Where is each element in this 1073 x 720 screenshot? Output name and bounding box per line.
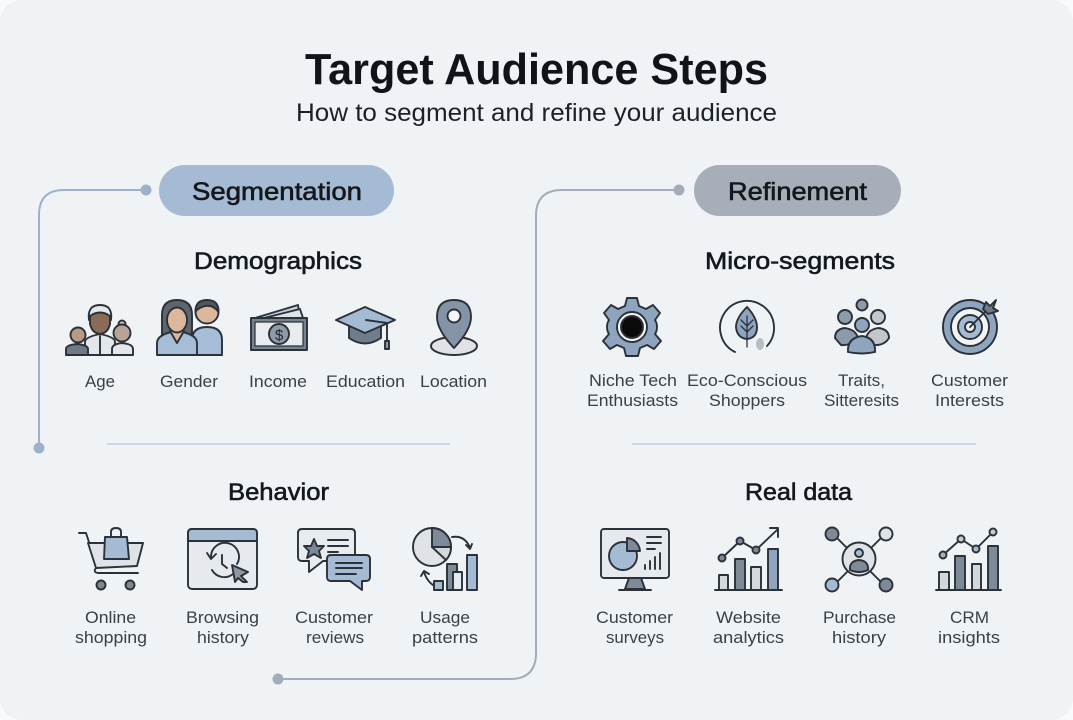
icon: browsing history	[188, 529, 257, 589]
label: Online shopping: shopping	[75, 628, 147, 647]
label: Browsing history	[186, 608, 259, 647]
label: Niche Tech Enthusiasts: Niche Tech	[589, 371, 677, 390]
label: Niche Tech Enthusiasts	[587, 371, 678, 410]
icon: income	[251, 305, 307, 350]
label: Age: Age	[85, 372, 115, 391]
label: Online shopping	[75, 608, 147, 647]
label: Traits, Sitteresits: Traits,	[838, 371, 885, 390]
icon: traits group	[835, 300, 889, 354]
label: CRM insights: insights	[938, 628, 1000, 647]
label: Website analytics: analytics	[713, 628, 784, 647]
connector: refinement	[272, 184, 684, 684]
pill: Refinement: Refinement	[728, 178, 867, 206]
icon: website analytics	[715, 528, 782, 590]
label: Customer surveys	[596, 608, 673, 647]
icon: income: $	[275, 327, 284, 344]
label: Location: Location	[420, 372, 487, 391]
icon: location	[431, 300, 477, 355]
icon: education	[336, 307, 395, 349]
label: Customer Interests	[931, 371, 1008, 410]
icon: leaf	[720, 301, 774, 352]
subtitle: How to segment and refine your audience	[296, 99, 777, 127]
icon: shopping cart	[79, 528, 143, 590]
label: Usage patterns	[412, 608, 478, 647]
label: Browsing history: history	[197, 628, 250, 647]
label: Customer reviews: Customer	[295, 608, 373, 627]
label: Customer reviews: reviews	[306, 628, 364, 647]
icon: customer reviews	[298, 529, 370, 590]
label: Eco-Conscious Shoppers: Eco-Conscious	[687, 371, 807, 390]
heading: Real data: Real data	[745, 479, 853, 506]
pill: Segmentation	[159, 165, 394, 216]
label: CRM insights: CRM	[950, 608, 989, 627]
label: Customer Interests: Interests	[935, 391, 1004, 410]
icon: usage patterns	[413, 528, 477, 590]
pill: Refinement	[694, 165, 901, 216]
label: Customer Interests: Customer	[931, 371, 1008, 390]
label: Eco-Conscious Shoppers	[687, 371, 807, 410]
heading: Micro-segments: Micro-segments	[705, 248, 895, 275]
label: Education: Education	[326, 372, 405, 391]
label: Customer surveys: surveys	[606, 628, 664, 647]
label: Usage patterns: Usage	[420, 608, 470, 627]
label: Purchase history: Purchase	[823, 608, 896, 627]
label: Customer reviews	[295, 608, 373, 647]
label: Traits, Sitteresits: Sitteresits	[824, 391, 899, 410]
label: CRM insights	[938, 608, 1000, 647]
label: Browsing history: Browsing	[186, 608, 259, 627]
label: Traits, Sitteresits	[824, 371, 899, 410]
icon: gender	[157, 300, 222, 355]
icon: target	[943, 300, 998, 354]
label: Niche Tech Enthusiasts: Enthusiasts	[587, 391, 678, 410]
icon: gear	[603, 298, 661, 356]
label: Website analytics: Website	[716, 608, 781, 627]
label: Website analytics	[713, 608, 784, 647]
label: Purchase history: history	[832, 628, 887, 647]
icon: age	[66, 305, 133, 355]
icon: CRM insights	[936, 528, 1001, 590]
connector: segmentation	[34, 184, 152, 454]
label: Income: Income	[249, 372, 307, 391]
title: Target Audience Steps	[305, 45, 768, 94]
label: Purchase history	[823, 608, 896, 647]
heading: Behavior: Behavior	[228, 479, 329, 506]
label: Customer surveys: Customer	[596, 608, 673, 627]
label: Usage patterns: patterns	[412, 628, 478, 647]
icon: purchase history	[826, 528, 892, 592]
label: Eco-Conscious Shoppers: Shoppers	[709, 391, 785, 410]
icon: customer surveys	[601, 529, 669, 590]
label: Gender: Gender	[160, 372, 218, 391]
label: Online shopping: Online	[85, 608, 136, 627]
pill: Segmentation: Segmentation	[192, 178, 362, 206]
heading: Demographics: Demographics	[194, 248, 362, 275]
